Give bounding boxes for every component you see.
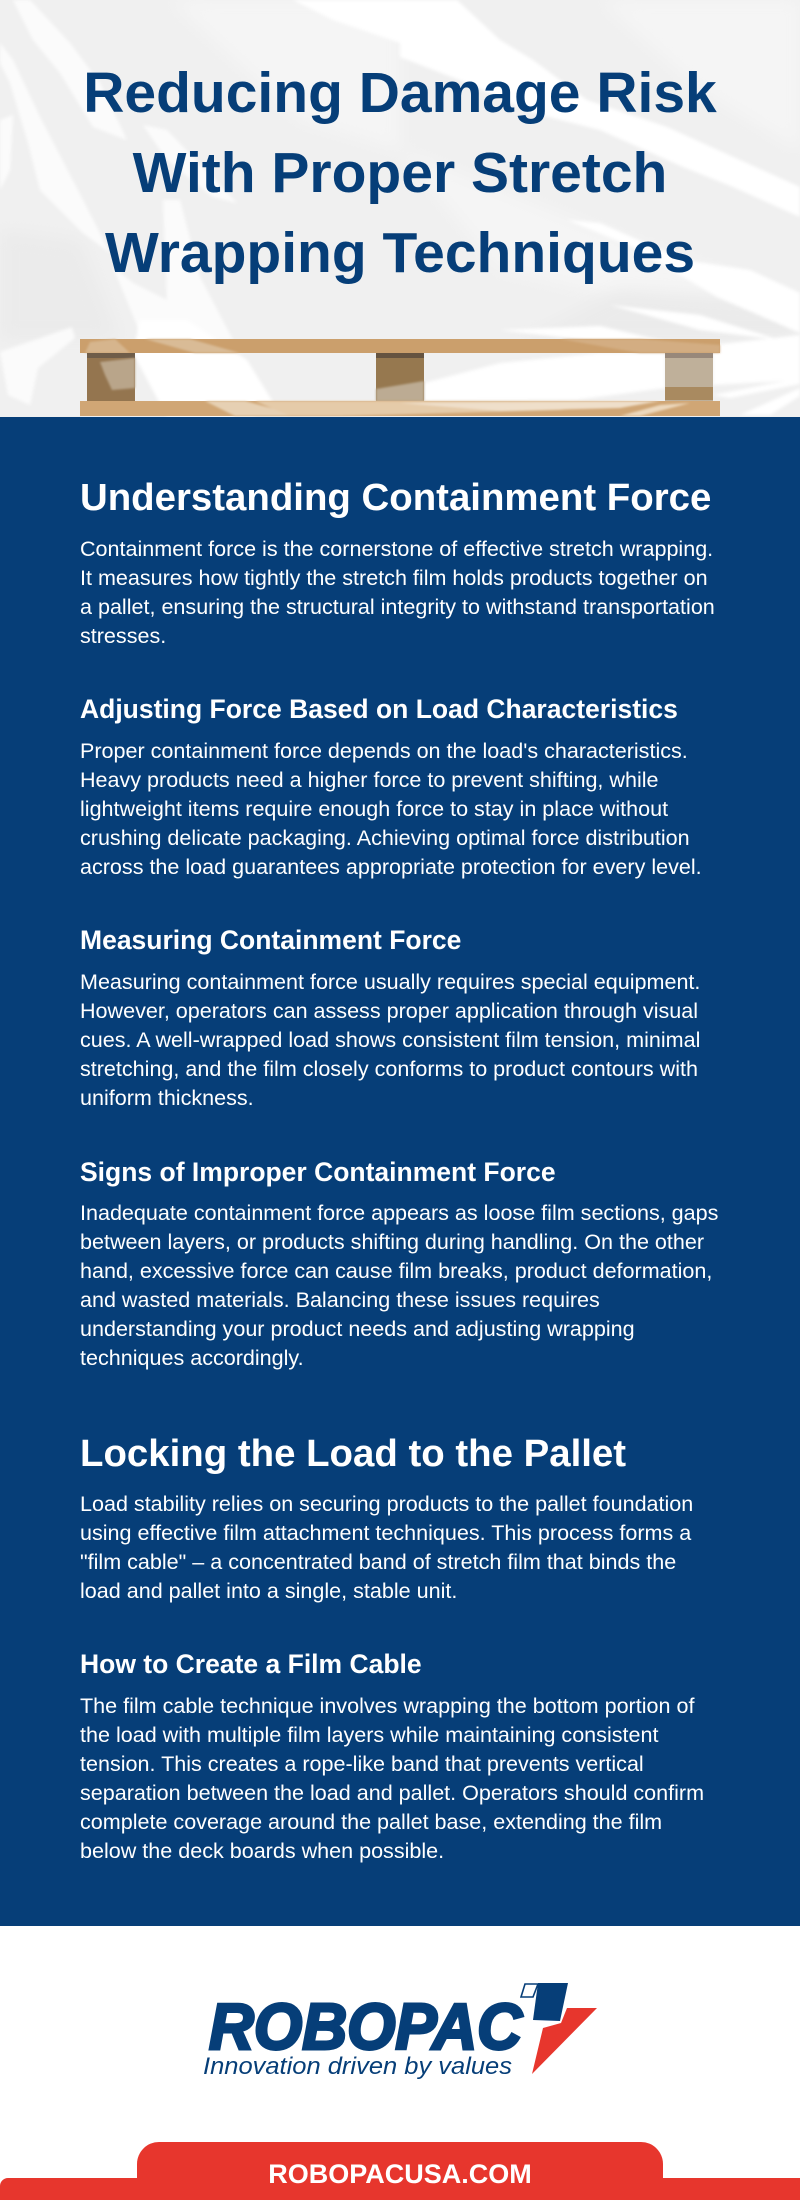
title: Wrapping Techniques <box>105 221 695 285</box>
text: measuring: cues. A well-wrapped load shows consistent film tension, minimal <box>80 1027 700 1052</box>
subheading: Signs of Improper Containment Force: Signs of Improper Containment Force <box>80 1157 556 1187</box>
text: signs: hand, excessive force can cause film breaks, product deformation, <box>80 1258 712 1283</box>
text: load stability: using effective film attachment techniques. This process forms a <box>80 1520 691 1545</box>
text: signs <box>80 1200 718 1370</box>
text: signs: understanding your product needs and adjusting wrapping <box>80 1316 635 1341</box>
text: containment force intro: a pallet, ensuring the structural integrity to withstand transportation <box>80 594 715 619</box>
text: containment force intro <box>80 536 715 648</box>
left support block <box>87 353 135 401</box>
footer tab <box>137 2142 663 2200</box>
bottom deck board <box>80 401 720 416</box>
text: load stability <box>80 1491 693 1603</box>
footer URL: ROBOPACUSA.COM <box>268 2159 532 2189</box>
text: containment force intro: stresses. <box>80 623 166 648</box>
text: measuring: Measuring containment force usually requires special equipment. <box>80 969 700 994</box>
text: containment force intro: Containment force is the cornerstone of effective stretch wrapping. <box>80 536 713 561</box>
text: adjusting force <box>80 738 702 879</box>
center support block <box>376 353 424 401</box>
text: adjusting force: lightweight items require enough force to stay in place without <box>80 796 668 821</box>
text: adjusting force: Heavy products need a higher force to prevent shifting, while <box>80 767 659 792</box>
logo bolt: red part <box>532 2008 597 2074</box>
text: measuring: stretching, and the film closely conforms to product contours with <box>80 1056 698 1081</box>
text: signs: between layers, or products shifting during handling. On the other <box>80 1229 704 1254</box>
text: signs: Inadequate containment force appears as loose film sections, gaps <box>80 1200 718 1225</box>
text: load stability: "film cable" – a concentrated band of stretch film that binds the <box>80 1549 676 1574</box>
heading: Locking the Load to the Pallet: Locking the Load to the Pallet <box>80 1432 626 1475</box>
title: Reducing Damage Risk <box>83 61 717 125</box>
logo small square mark <box>521 1984 538 1997</box>
text: film cable: separation between the load and pallet. Operators should confirm <box>80 1780 704 1805</box>
logo tagline: Innovation driven by values <box>203 2053 512 2080</box>
subheading: Adjusting Force: Adjusting Force Based on Load Characteristics <box>80 694 678 724</box>
text: containment force intro: It measures how tightly the stretch film holds products together on <box>80 565 708 590</box>
text: signs: techniques accordingly. <box>80 1345 304 1370</box>
title: With Proper Stretch <box>133 141 667 205</box>
navy content panel <box>0 417 800 1926</box>
top deck board <box>80 339 720 353</box>
subheading: Measuring Containment Force: Measuring Containment Force <box>80 925 461 955</box>
text: film cable: tension. This creates a rope-like band that prevents vertical <box>80 1751 644 1776</box>
footer band <box>0 2178 800 2200</box>
subheading: How to Create a Film Cable: How to Create a Film Cable <box>80 1649 422 1679</box>
logo bolt: blue part <box>533 1983 568 2021</box>
logo wordmark: ROBOPAC <box>209 1990 523 2063</box>
text: film cable <box>80 1693 704 1863</box>
logo: Robopac <box>203 1983 597 2080</box>
text: adjusting force: Proper containment force depends on the load's characteristics. <box>80 738 688 763</box>
text: load stability: Load stability relies on securing products to the pallet foundation <box>80 1491 693 1516</box>
text: film cable: The film cable technique involves wrapping the bottom portion of <box>80 1693 694 1718</box>
heading: Understanding Containment Force: Understanding Containment Force <box>80 476 711 519</box>
text: adjusting force: crushing delicate packaging. Achieving optimal force distribution <box>80 825 690 850</box>
title <box>83 61 717 285</box>
text: film cable: the load with multiple film layers while maintaining consistent <box>80 1722 658 1747</box>
text: adjusting force: across the load guarantees appropriate protection for every level. <box>80 854 702 879</box>
right support block <box>665 353 713 401</box>
text: measuring <box>80 969 700 1110</box>
text: load stability: load and pallet into a single, stable unit. <box>80 1578 457 1603</box>
text: measuring: However, operators can assess proper application through visual <box>80 998 698 1023</box>
text: film cable: complete coverage around the pallet base, extending the film <box>80 1809 662 1834</box>
pallet illustration <box>80 338 722 417</box>
text: film cable: below the deck boards when possible. <box>80 1838 444 1863</box>
text: signs: and wasted materials. Balancing these issues requires <box>80 1287 600 1312</box>
text: measuring: uniform thickness. <box>80 1085 254 1110</box>
header background: stretch film texture <box>0 0 800 417</box>
